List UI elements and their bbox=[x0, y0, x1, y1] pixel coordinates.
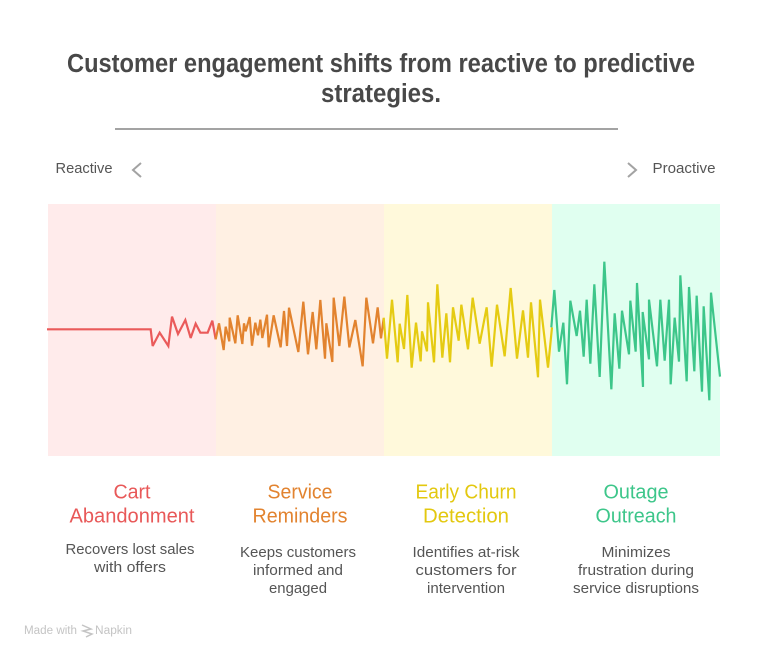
panel: early churn detection background bbox=[384, 204, 552, 456]
text: outage outreach description: frustration during bbox=[578, 562, 694, 579]
heading: early churn detection: Early Churn bbox=[416, 482, 516, 504]
title: Customer engagement shifts from reactive to predictive bbox=[67, 50, 695, 78]
heading: cart abandonment bbox=[70, 482, 195, 528]
text: service reminders description: engaged bbox=[269, 580, 327, 597]
heading: cart abandonment: Abandonment bbox=[70, 506, 195, 528]
waveform: red segment bbox=[47, 317, 216, 346]
panel: outage outreach background bbox=[552, 204, 720, 456]
text: cart abandonment description bbox=[66, 541, 194, 576]
footer: made with napkin: Napkin bbox=[95, 625, 132, 637]
icon: napkin logo bbox=[82, 625, 92, 637]
chart: waveform bbox=[47, 262, 720, 400]
text: early churn description: intervention bbox=[427, 580, 505, 597]
text: early churn description: customers for bbox=[416, 562, 517, 579]
column: outage outreach bbox=[573, 482, 699, 597]
title: strategies. bbox=[321, 80, 441, 108]
title bbox=[67, 50, 695, 108]
text: early churn description: Identifies at-risk bbox=[412, 544, 520, 561]
icon: right chevron bbox=[628, 163, 636, 177]
heading: service reminders bbox=[252, 482, 348, 528]
column: cart abandonment bbox=[66, 482, 195, 576]
text: service reminders description bbox=[240, 544, 356, 597]
waveform: yellow segment bbox=[384, 284, 552, 377]
text: early churn description bbox=[412, 544, 520, 597]
waveform: green segment bbox=[551, 262, 720, 400]
title underline bbox=[115, 128, 618, 130]
text: service reminders description: Keeps customers bbox=[240, 544, 356, 561]
heading: cart abandonment: Cart bbox=[114, 482, 151, 504]
axis label: reactive: Reactive bbox=[56, 160, 112, 177]
heading: early churn detection bbox=[416, 482, 516, 528]
text: outage outreach description: service disruptions bbox=[573, 580, 699, 597]
text: outage outreach description bbox=[573, 544, 699, 597]
axis label: reactive bbox=[56, 160, 141, 177]
column: service reminders bbox=[240, 482, 356, 597]
text: outage outreach description: Minimizes bbox=[602, 544, 670, 561]
text: cart abandonment description: Recovers lost sales bbox=[66, 541, 194, 558]
panel: service reminders background bbox=[216, 204, 384, 456]
heading: service reminders: Reminders bbox=[252, 506, 348, 528]
column: early churn detection bbox=[412, 482, 520, 597]
heading: outage outreach: Outage bbox=[604, 482, 668, 504]
waveform: orange segment bbox=[216, 297, 384, 366]
axis label: proactive: Proactive bbox=[652, 160, 716, 177]
panel: cart abandonment background bbox=[48, 204, 216, 456]
icon: left chevron bbox=[133, 163, 141, 177]
footer: made with napkin bbox=[24, 625, 132, 637]
heading: outage outreach bbox=[596, 482, 676, 528]
heading: early churn detection: Detection bbox=[423, 506, 509, 528]
heading: service reminders: Service bbox=[268, 482, 332, 504]
heading: outage outreach: Outreach bbox=[596, 506, 676, 528]
footer: made with napkin: Made with bbox=[24, 625, 77, 637]
text: service reminders description: informed and bbox=[253, 562, 343, 579]
text: cart abandonment description: with offers bbox=[93, 559, 166, 576]
